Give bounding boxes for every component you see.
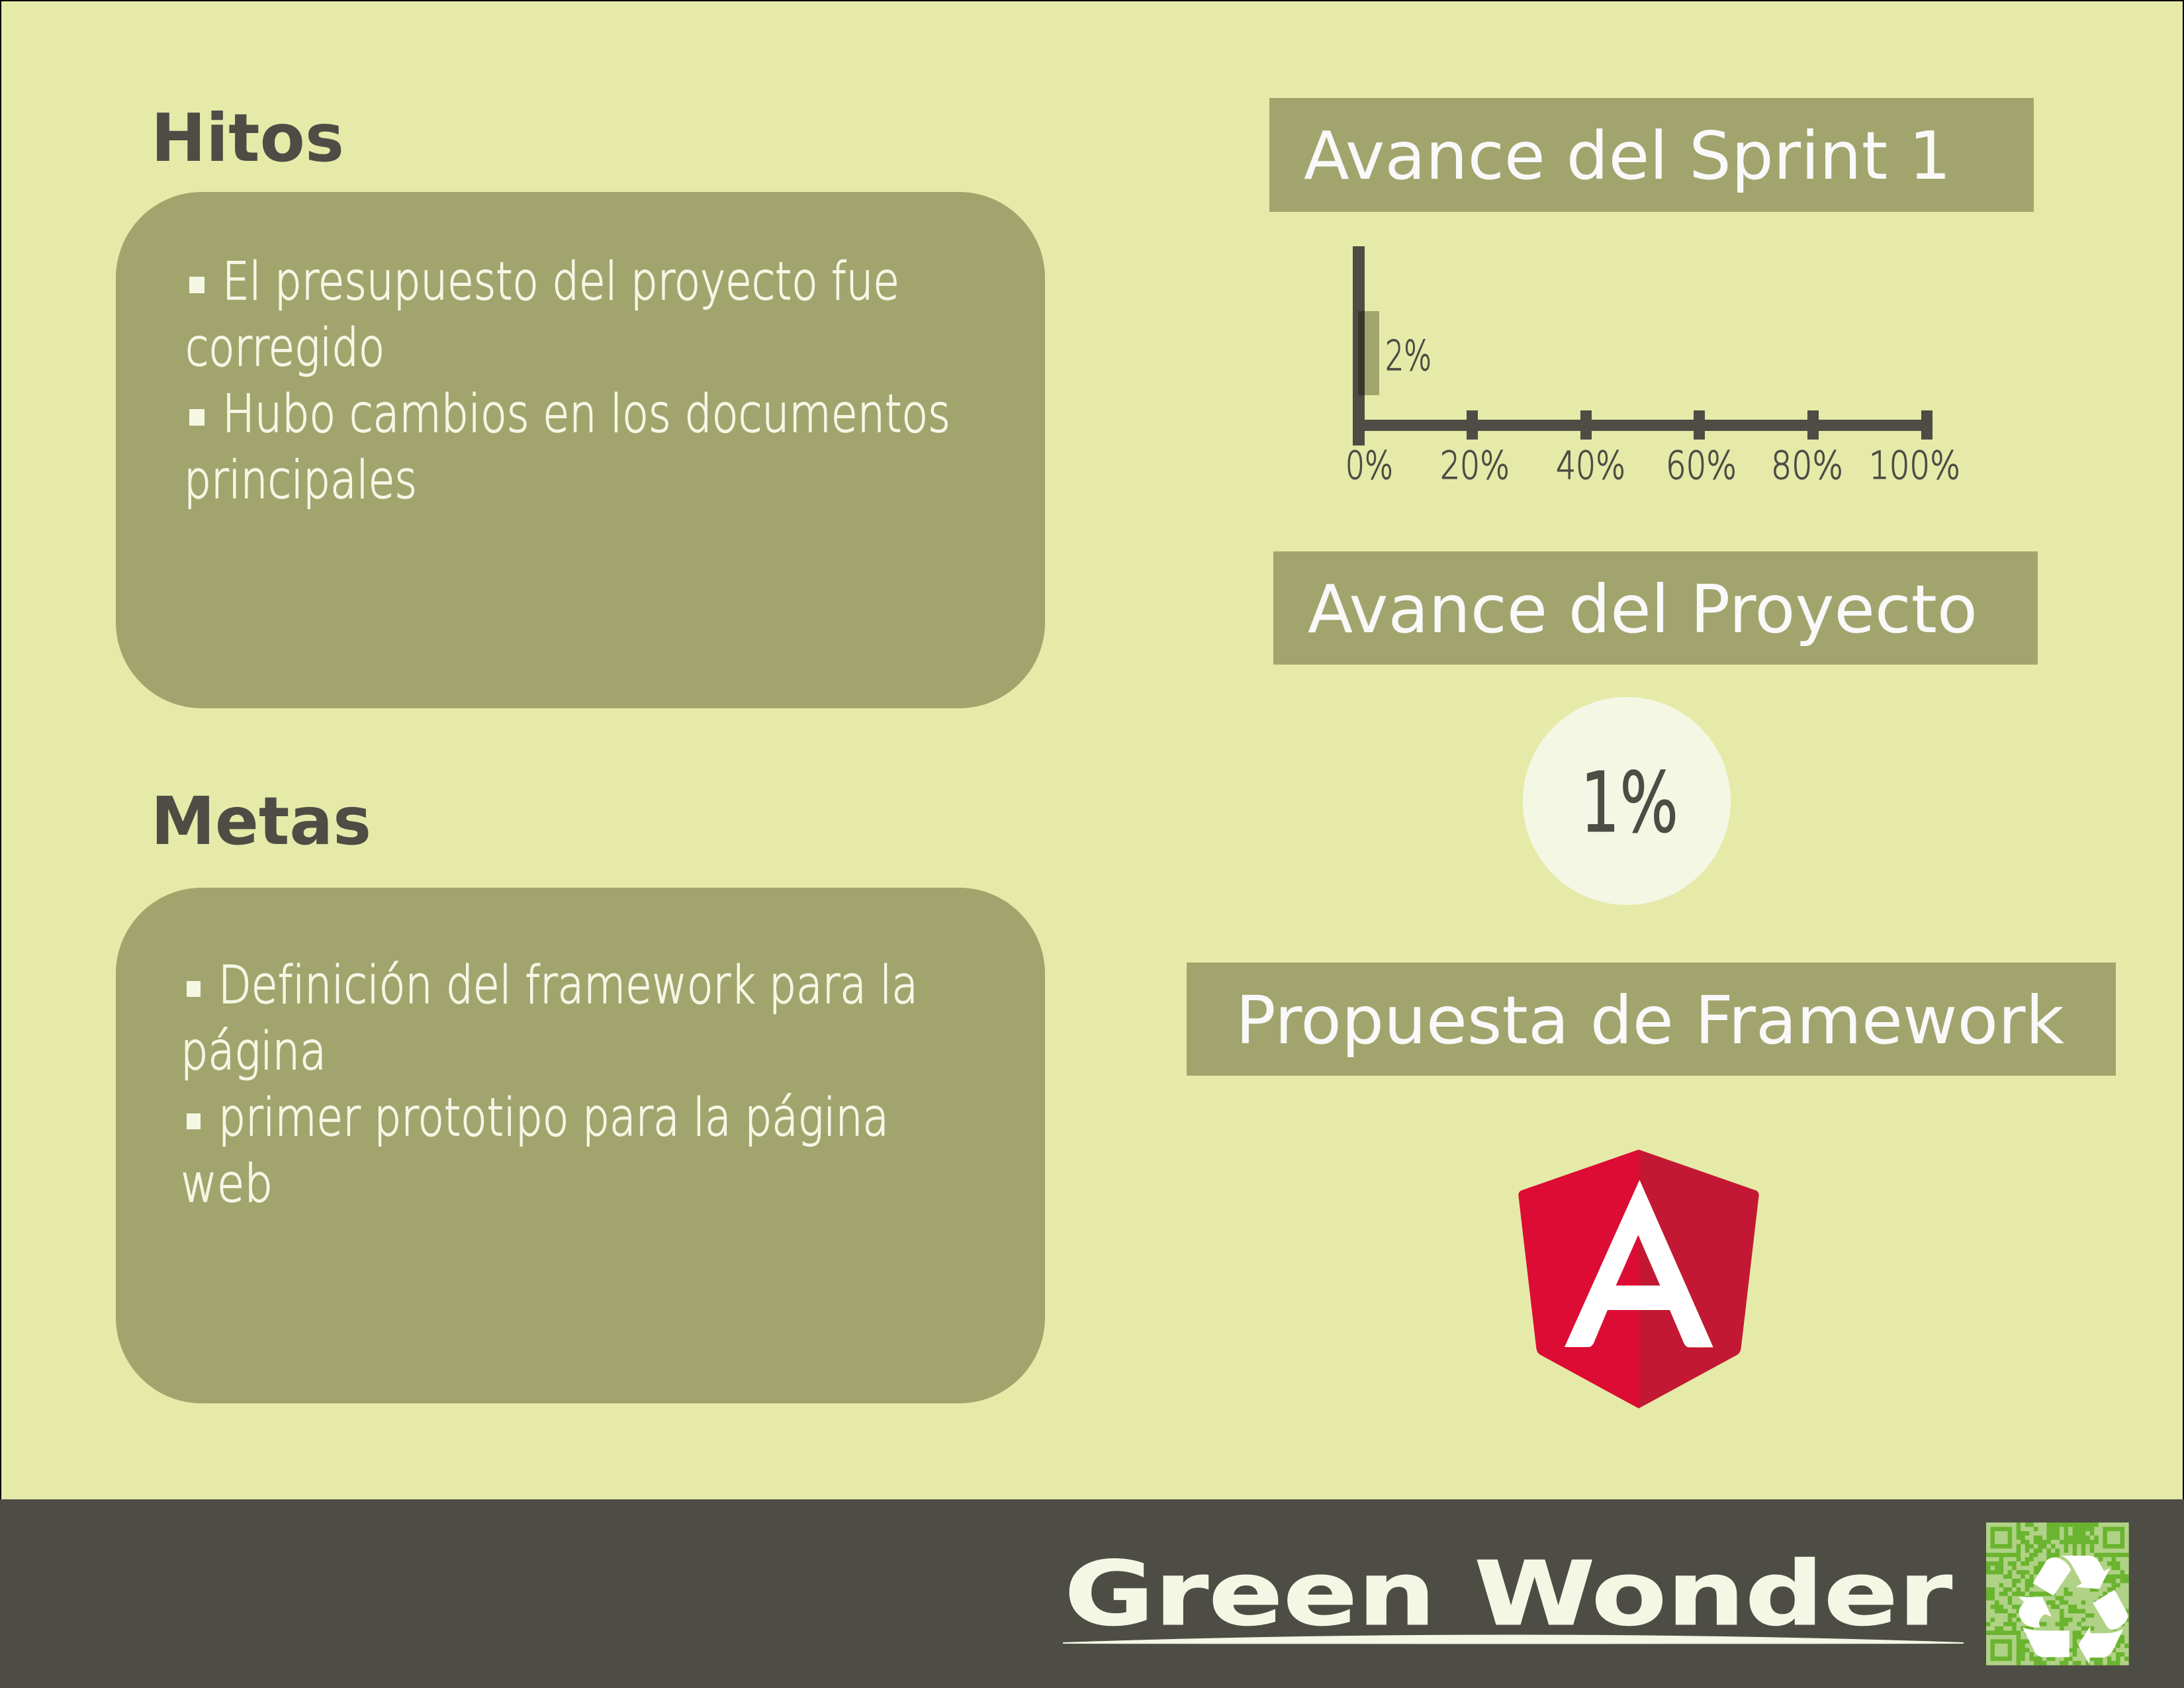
hitos text block <box>184 252 950 510</box>
hitos text block: Hubo cambios en los documentos <box>222 385 950 444</box>
icon: qr code with recycling symbol <box>1986 1523 2129 1665</box>
brand underline swoosh <box>1063 1635 1964 1644</box>
title bar: Avance del Proyecto <box>1273 551 2038 665</box>
metas text block: web <box>181 1154 273 1214</box>
title bar: Avance del Sprint 1 <box>1269 98 2034 212</box>
hitos text block: principales <box>184 451 417 510</box>
title bar: Avance del Proyecto: Avance del Proyecto <box>1308 571 1978 648</box>
title bar: Avance del Sprint 1: Avance del Sprint 1 <box>1304 117 1951 195</box>
bar chart: 80% <box>1771 443 1843 488</box>
bar chart: 40% <box>1556 443 1625 488</box>
bar chart: 100% <box>1869 443 1960 488</box>
panel: avance del sprint <box>1269 98 2034 488</box>
panel: avance del proyecto <box>1273 551 2038 905</box>
bar chart: 60% <box>1666 443 1737 488</box>
footer bar <box>0 1499 2184 1688</box>
metas text block: página <box>181 1022 326 1082</box>
panel: metas <box>116 782 1045 1403</box>
metas text block: Definición del framework para la <box>218 956 918 1015</box>
bar chart <box>1345 246 1960 488</box>
title bar: Propuesta de Framework: Propuesta de Framework <box>1236 982 2064 1059</box>
hitos text block: corregido <box>185 318 385 378</box>
bar chart: 2% <box>1385 332 1432 380</box>
bar chart: 20% <box>1440 443 1510 488</box>
title bar: Propuesta de Framework <box>1187 962 2116 1076</box>
icon: angular logo <box>1518 1150 1759 1409</box>
progress circle: 1% <box>1580 754 1678 851</box>
metas text block: primer prototipo para la página <box>218 1088 889 1148</box>
panel: hitos <box>116 99 1045 708</box>
hitos text block: El presupuesto del proyecto fue <box>222 252 899 312</box>
bar chart: 0% <box>1345 443 1393 488</box>
heading: Metas: Metas <box>151 782 371 860</box>
brand name: Green Wonder <box>1064 1542 1952 1646</box>
heading: Hitos: Hitos <box>151 99 344 177</box>
hitos box <box>116 192 1045 708</box>
metas text block <box>181 956 918 1214</box>
panel: propuesta de framework <box>1187 962 2116 1409</box>
metas box <box>116 888 1045 1403</box>
progress circle <box>1523 697 1731 905</box>
